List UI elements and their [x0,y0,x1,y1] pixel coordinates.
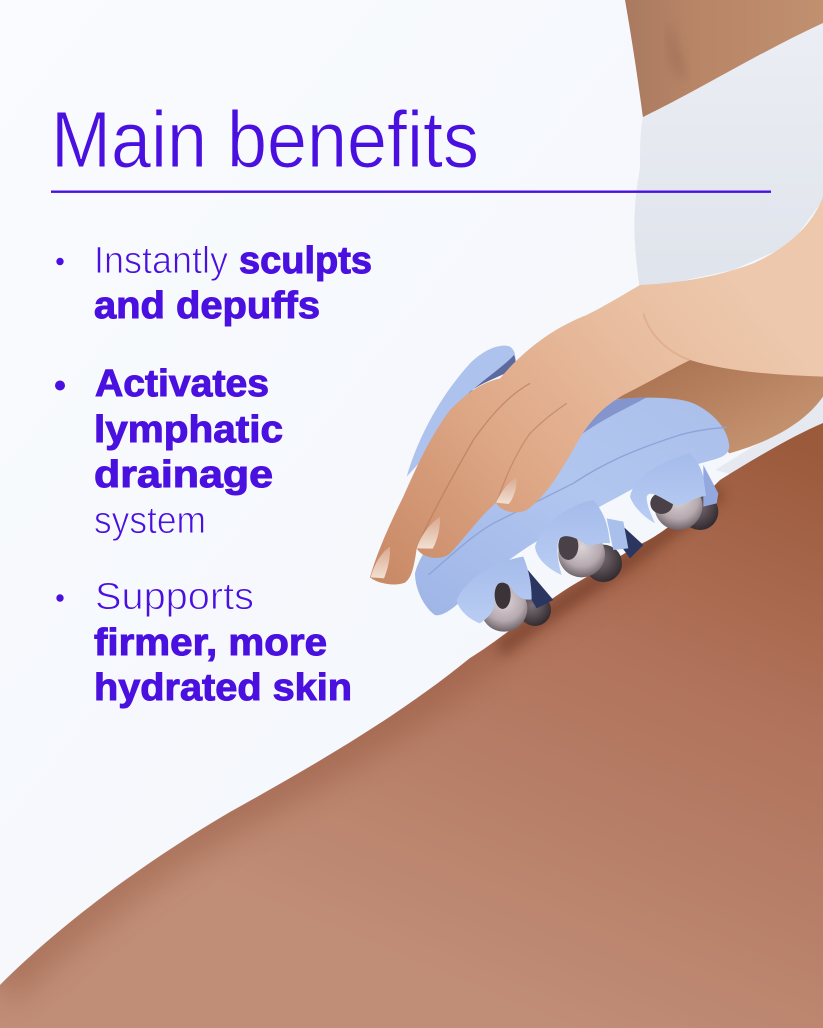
device: body top shadow [540,397,647,461]
palm shadow under hand [613,360,823,453]
benefit 2 [55,363,283,542]
text: sculpts and depuffs: sculpts [239,240,372,282]
text: activates lymphatic drainage system: lymphatic [94,409,283,451]
benefit 3 [56,576,352,709]
massager and hand [370,197,823,632]
text: sculpts and depuffs: Instantly [94,240,228,282]
text: supports firmer, more hydrated skin: hydrated skin [94,667,352,709]
device: body [415,398,729,615]
device: front rollers [481,482,702,632]
device: massager [407,346,729,632]
device: rear rollers and stems [519,465,718,626]
text: supports firmer, more hydrated skin: firmer, more [94,622,327,664]
bullet [56,258,64,265]
title: Main benefits [51,95,479,184]
device: roller caps [457,453,706,623]
photo: thigh [0,420,823,1028]
photo: white top below hand [715,385,823,474]
device: handle [407,346,515,477]
bullet [55,380,65,390]
benefit 1 [56,240,372,327]
text: activates lymphatic drainage system: drainage [94,454,273,496]
bullet [56,594,64,602]
device: handle shadow [463,355,516,400]
hand: finger nails [371,477,517,578]
text: activates lymphatic drainage system: system [94,500,206,542]
text: supports firmer, more hydrated skin: Supports [95,576,254,618]
text: sculpts and depuffs: and depuffs [94,285,320,327]
hand: finger separation lines [417,383,530,548]
photo: hand [370,197,823,584]
text: activates lymphatic drainage system: Activates [95,363,269,405]
divider line [51,190,771,193]
photo: torso skin [625,0,823,118]
device: seam [428,427,727,575]
photo: white ribbed top [634,23,823,290]
